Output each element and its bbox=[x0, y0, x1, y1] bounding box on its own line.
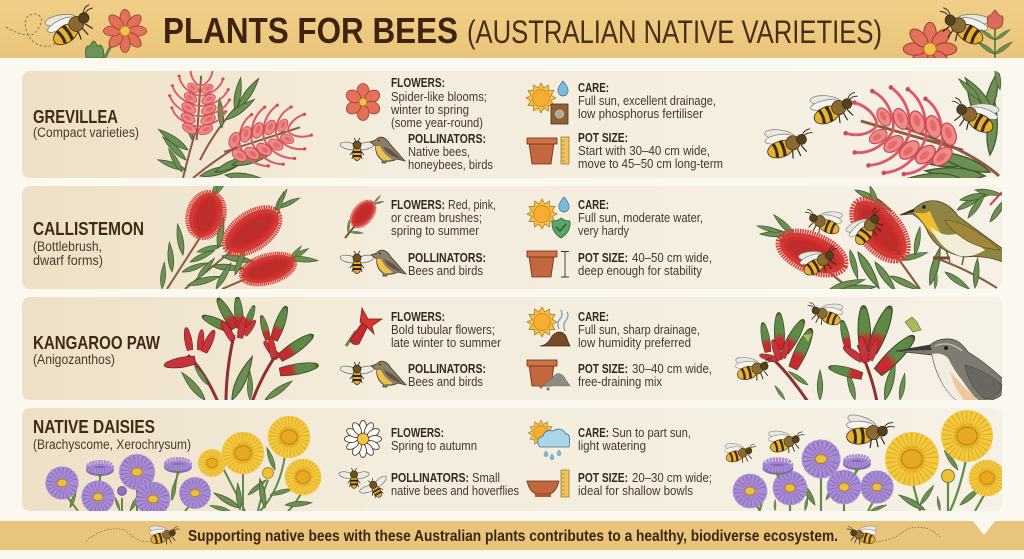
heading: callistemon: CALLISTEMON bbox=[33, 218, 144, 239]
text: care: Full sun, moderate water, bbox=[578, 211, 703, 225]
text: pollinators bbox=[391, 471, 519, 498]
text: care: low phosphorus fertiliser bbox=[578, 107, 703, 121]
text: pot size bbox=[578, 471, 712, 498]
panel: grevillea bbox=[22, 71, 1002, 178]
text: flowers: FLOWERS: bbox=[391, 76, 445, 90]
bee trail left bbox=[86, 529, 153, 542]
text: flowers bbox=[391, 426, 477, 453]
text: pot size bbox=[578, 251, 712, 278]
text: pot size: move to 45–50 cm long-term bbox=[578, 157, 723, 171]
illustration: callistemon right bbox=[756, 185, 1009, 293]
text: pollinators: honeybees, birds bbox=[408, 158, 493, 172]
bee flight trail bbox=[6, 14, 60, 46]
text: pot size: 30–40 cm wide, bbox=[632, 362, 712, 376]
header banner bbox=[0, 0, 1024, 58]
text: pollinators bbox=[408, 251, 486, 278]
text: flowers: or cream brushes; bbox=[391, 211, 482, 225]
text: pot size bbox=[578, 131, 723, 171]
panel: callistemon bbox=[22, 186, 1002, 289]
text: flowers: Bold tubular flowers; bbox=[391, 323, 495, 337]
icon: pot and gravel bbox=[527, 360, 570, 390]
text: flowers: FLOWERS: bbox=[391, 426, 444, 440]
icon: two bees bbox=[338, 468, 394, 505]
icon: white daisy bbox=[344, 420, 382, 458]
text: pollinators bbox=[408, 132, 493, 172]
icon: sun, steam and soil bbox=[527, 307, 570, 346]
panel: native daisies bbox=[22, 408, 1005, 516]
heading: grevillea: GREVILLEA bbox=[33, 106, 118, 127]
text: care bbox=[578, 198, 703, 238]
text: pot size: POT SIZE: bbox=[578, 471, 628, 485]
footer banner bbox=[0, 518, 1024, 550]
text: flowers: FLOWERS: bbox=[391, 198, 445, 212]
heading: kangaroo paw: KANGAROO PAW bbox=[33, 332, 160, 353]
panel: kangaroo paw bbox=[22, 292, 1004, 402]
icon: pot and ruler bbox=[527, 137, 569, 164]
icon: pot and height arrow bbox=[527, 251, 569, 277]
subheading: grevillea: (Compact varieties) bbox=[33, 125, 139, 140]
footer text: Supporting native bees with these Australian plants contributes to a healthy, biodiverse ecosystem. bbox=[188, 528, 838, 545]
text: care: CARE: bbox=[578, 198, 609, 212]
text: pot size: deep enough for stability bbox=[578, 264, 703, 278]
icon: bees on callistemon bbox=[794, 198, 891, 282]
illustration: callistemon left bbox=[160, 177, 318, 290]
icon: bees on daisies bbox=[722, 408, 896, 467]
text: flowers: (some year-round) bbox=[391, 116, 483, 130]
subheading: callistemon: (Bottlebrush, bbox=[33, 239, 102, 254]
icon: bee bbox=[339, 251, 375, 274]
text: flowers: FLOWERS: bbox=[391, 310, 445, 324]
text: care: Sun to part sun, bbox=[612, 426, 691, 440]
icon: footer bee left bbox=[147, 518, 183, 548]
icon: footer bee right bbox=[843, 518, 879, 548]
text: flowers: spring to summer bbox=[391, 224, 479, 238]
text: care: Full sun, sharp drainage, bbox=[578, 323, 700, 337]
icon: header flower and bee right bbox=[902, 7, 1013, 58]
icon: sun, drop and shield bbox=[527, 197, 570, 238]
text: flowers: Red, pink, bbox=[448, 198, 496, 212]
text: care: low humidity preferred bbox=[578, 336, 691, 350]
icon: header bee bbox=[40, 0, 104, 53]
text: care bbox=[578, 81, 716, 121]
subheading: native daisies: (Brachyscome, Xerochrysum) bbox=[33, 437, 191, 452]
text: care: CARE: bbox=[578, 81, 609, 95]
title: PLANTS FOR BEES bbox=[163, 10, 458, 51]
icon: honeyeater bird bbox=[900, 201, 1003, 265]
heading: native daisies: NATIVE DAISIES bbox=[33, 416, 155, 437]
text: flowers: late winter to summer bbox=[391, 336, 501, 350]
illustration: grevillea right bbox=[843, 71, 1002, 178]
text: pollinators: native bees and hoverflies bbox=[391, 484, 519, 498]
text: flowers: Spring to autumn bbox=[391, 439, 477, 453]
icon: bird bbox=[371, 361, 406, 387]
subtitle: (AUSTRALIAN NATIVE VARIETIES) bbox=[467, 14, 882, 50]
icon: bee bbox=[339, 138, 375, 160]
notch bbox=[973, 521, 995, 535]
subheading: kangaroo paw: (Anigozanthos) bbox=[33, 352, 115, 367]
icon: bowl and ruler bbox=[527, 470, 569, 497]
text: pot size bbox=[578, 362, 712, 389]
text: care: very hardy bbox=[578, 224, 630, 238]
icon: header flower bbox=[86, 9, 147, 58]
icon: sun and rain cloud bbox=[528, 420, 570, 460]
text: pollinators bbox=[408, 362, 486, 389]
illustration: kangaroo paw left bbox=[163, 296, 319, 402]
illustration: daisies left bbox=[46, 416, 321, 516]
text: flowers bbox=[391, 198, 496, 238]
subheading: callistemon bbox=[33, 239, 103, 268]
icon: grey honeyeater bird bbox=[896, 339, 1004, 401]
bee trail right bbox=[876, 527, 940, 542]
text: pot size: free-draining mix bbox=[578, 375, 663, 389]
text: pollinators: Bees and birds bbox=[408, 264, 483, 278]
text: pot size: 40–50 cm wide, bbox=[632, 251, 712, 265]
text: care bbox=[578, 426, 691, 453]
text: flowers: Spider-like blooms; bbox=[391, 90, 487, 104]
text: pollinators: Small bbox=[472, 471, 500, 485]
text: flowers bbox=[391, 310, 501, 350]
illustration: kangaroo paw right bbox=[759, 304, 921, 402]
illustration: grevillea left bbox=[156, 71, 313, 178]
text: pot size: 20–30 cm wide; bbox=[632, 471, 712, 485]
text: care: CARE: bbox=[578, 426, 609, 440]
icon: bees on kangaroo paw bbox=[732, 292, 846, 385]
text: care: light watering bbox=[578, 439, 646, 453]
text: pot size: POT SIZE: bbox=[578, 362, 628, 376]
text: pollinators: POLLINATORS: bbox=[408, 132, 486, 146]
icon: sun, drop and fertiliser bbox=[526, 81, 568, 124]
icon: bottlebrush bbox=[345, 194, 384, 238]
text: pollinators: POLLINATORS: bbox=[391, 471, 469, 485]
text: pot size: POT SIZE: bbox=[578, 131, 628, 145]
text: pollinators: Native bees, bbox=[408, 145, 470, 159]
subheading: callistemon: dwarf forms) bbox=[33, 253, 103, 268]
icon: tubular flower bbox=[346, 308, 382, 346]
text: pollinators: Bees and birds bbox=[408, 375, 483, 389]
text: care: CARE: bbox=[578, 310, 609, 324]
icon: bird bbox=[371, 250, 406, 276]
text: flowers: winter to spring bbox=[390, 103, 469, 117]
illustration: daisies right bbox=[733, 410, 1005, 513]
text: care bbox=[578, 310, 700, 350]
icon: bees right bbox=[760, 79, 1004, 165]
text: care: Full sun, excellent drainage, bbox=[578, 94, 716, 108]
text: pollinators: POLLINATORS: bbox=[408, 362, 486, 376]
text: flowers bbox=[390, 76, 487, 130]
icon: bee bbox=[339, 362, 375, 384]
text: pot size: Start with 30–40 cm wide, bbox=[578, 144, 710, 158]
text: pot size: POT SIZE: bbox=[578, 251, 628, 265]
text: pollinators: POLLINATORS: bbox=[408, 251, 486, 265]
text: pot size: ideal for shallow bowls bbox=[578, 484, 693, 498]
icon: bird bbox=[370, 137, 405, 163]
icon: flower bbox=[344, 84, 382, 120]
